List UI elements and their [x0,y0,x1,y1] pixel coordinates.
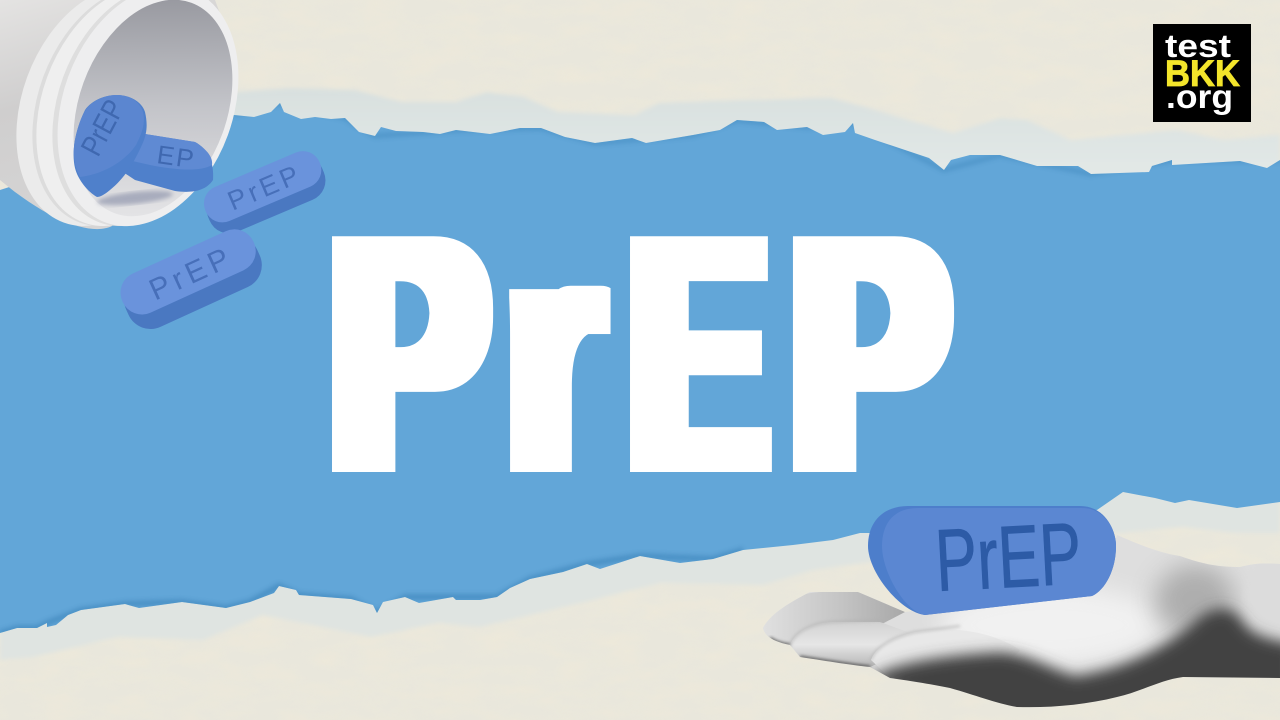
bottle inside [45,0,261,239]
title: PrEP: E [632,168,765,539]
spilled pill: lower [114,222,270,337]
pill inside bottle: second: EP [155,139,198,174]
logo: testBKK.org: .org [1166,78,1233,115]
icon: hand holding pill [750,503,1280,720]
pill inside bottle: first: PrEP [75,95,131,161]
title: PrEP: P [792,168,947,539]
spilled pill: lower: PrEP [144,242,234,307]
title: PrEP [332,168,947,539]
finger creases [790,620,960,660]
logo: testBKK.org [1153,24,1251,122]
bottle neck ridges [0,0,263,251]
title: PrEP: r [509,168,599,539]
icon: pill bottle with pills [0,0,332,337]
finger: back [791,592,905,636]
title: PrEP: P [332,168,486,539]
large pill [868,503,1116,615]
fingertip shadows [770,638,870,667]
bottle body [0,0,237,229]
underside shadow [868,609,1280,720]
logo: testBKK.org: test [1165,28,1231,64]
spilled pill: upper: PrEP [223,160,303,216]
finger: front [871,633,998,666]
spilled pill: upper [198,146,332,240]
hand shading clipped to silhouette [763,536,1280,708]
bottle rim [26,0,270,252]
pill shadow inside bottle [97,188,173,208]
pill inside bottle: second [123,134,213,192]
torn paper edge: lower light strip [0,450,1280,660]
torn paper edge: upper light strip [225,88,1280,200]
blue torn paper band [0,103,1280,633]
finger: middle [790,622,890,667]
large pill: PrEP [933,503,1084,610]
pill inside bottle: first [74,95,147,197]
logo: testBKK.org: BKK [1165,53,1240,94]
